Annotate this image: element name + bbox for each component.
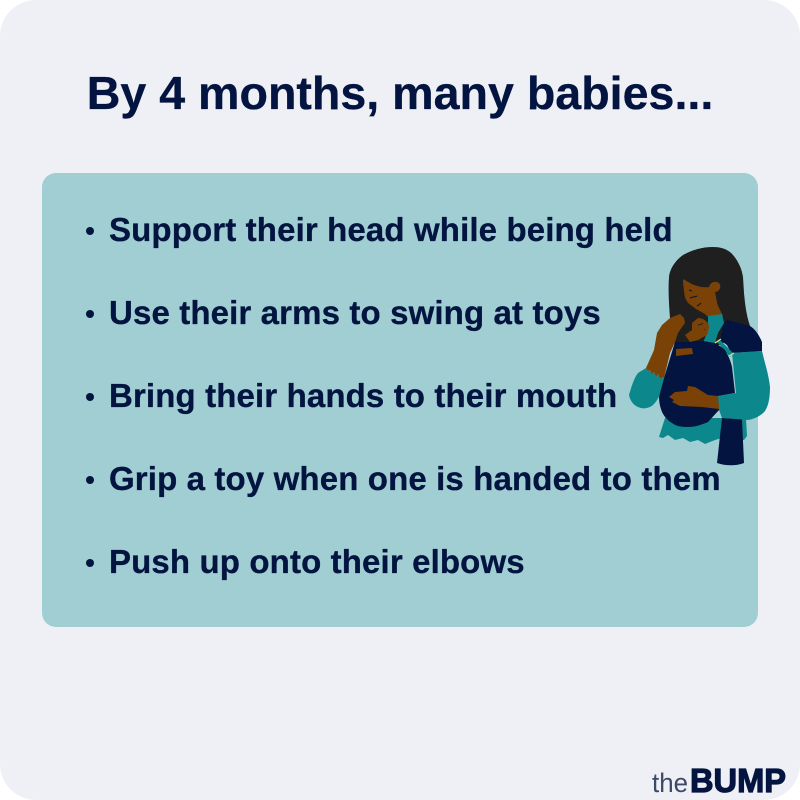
carrier strap [717,340,733,357]
title: By 4 months, many babies... [87,67,713,119]
lower arm [669,386,719,409]
carrier [659,341,735,427]
baby's eye [698,323,704,330]
logo: theBUMP: the [652,768,688,798]
logo: theBUMP: BUMP [690,763,786,800]
left sleeve [629,368,664,408]
right sleeve [718,351,770,420]
strap buckles [715,339,734,356]
milestone: grip a toy: Grip a toy when one is handed to them [109,460,721,497]
mother's face and neck [683,279,723,317]
carrier label [676,348,693,356]
milestone: push up: Push up onto their elbows [109,543,525,580]
panel: milestones [42,173,758,627]
milestone: head support: Support their head while being held [109,211,673,248]
illustration: mother holding baby in carrier [629,247,770,465]
shoulder puff [720,320,762,353]
strap tail [717,418,744,465]
milestone: swing at toys: Use their arms to swing at toys [109,294,601,331]
dress skirt [659,418,747,444]
mother's eyes and mouth [689,290,701,306]
baby face [685,318,709,342]
hair [669,247,750,345]
dress collar [703,314,724,343]
raised arm [646,314,685,379]
baby hair [678,305,698,342]
milestone: hands to mouth: Bring their hands to their mouth [109,377,617,414]
